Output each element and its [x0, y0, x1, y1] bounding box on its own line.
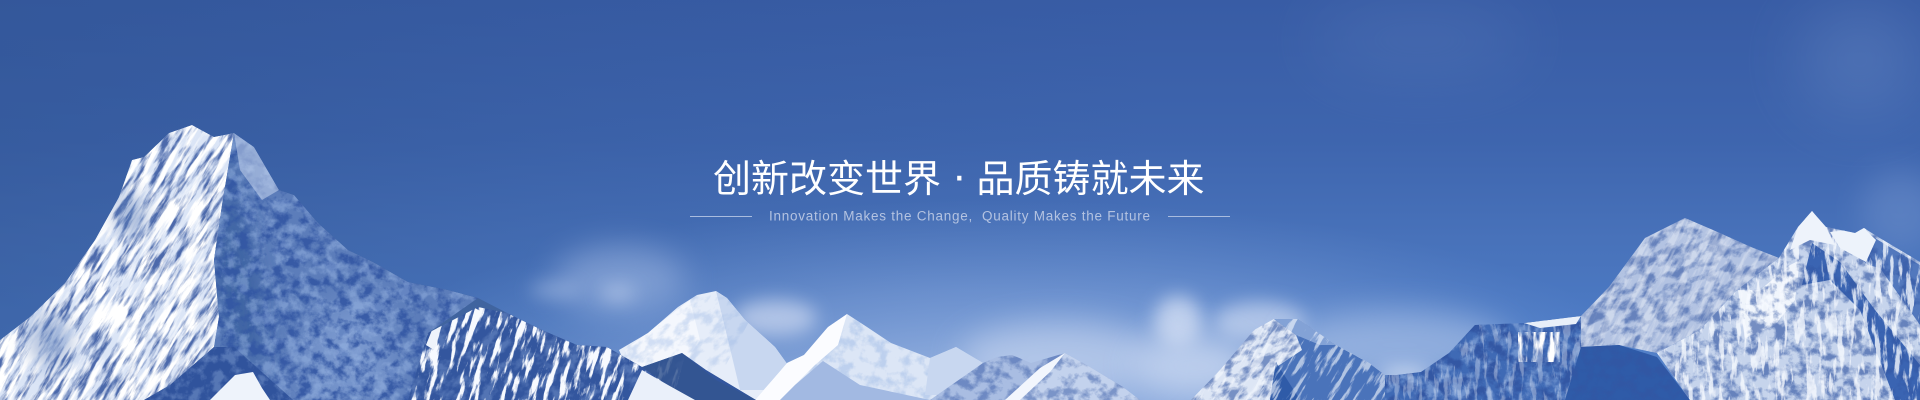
mountain: far snow peak B [750, 310, 990, 400]
lit snow face [0, 125, 234, 400]
clouds [529, 246, 1510, 398]
mountain: far snow peak A [619, 291, 787, 400]
front ridge [1650, 210, 1920, 400]
mountain: right massif [1385, 210, 1920, 400]
dark lower mound [1560, 345, 1695, 400]
dark lower-left buttress [140, 345, 295, 400]
title: 创新改变世界 [713, 159, 941, 201]
divider: right of subtitle [1168, 216, 1230, 217]
divider: left of subtitle [690, 216, 752, 217]
title: · [952, 151, 967, 200]
mountain: peak C [930, 353, 1140, 400]
mid blue massif [1385, 316, 1581, 400]
subtitle: Innovation Makes the Change, Quality Makes the Future [769, 208, 1150, 224]
title: 品质铸就未来 [976, 159, 1205, 201]
shaded face [214, 133, 478, 400]
mountain: peak D [1192, 319, 1385, 400]
mountain: large main peak [0, 120, 760, 400]
grey central peak [1581, 218, 1779, 353]
foothill with snow streaks [408, 307, 756, 400]
